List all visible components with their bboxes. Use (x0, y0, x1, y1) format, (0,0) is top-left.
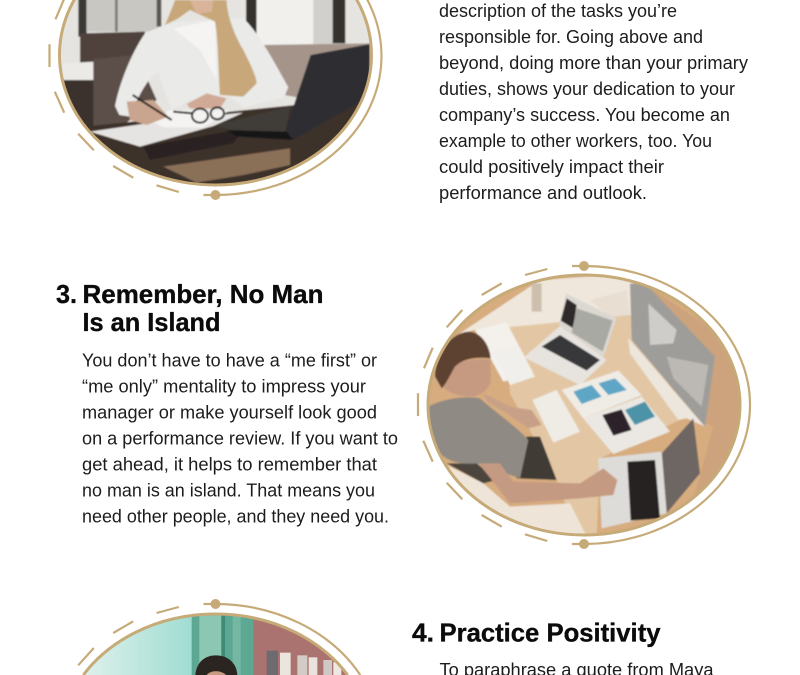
heading: tip 3: Remember, No Man (82, 279, 324, 309)
text block: tip 3 body: manager or make yourself look good (82, 402, 377, 422)
text block: tip 3 body: need other people, and they need you. (82, 506, 389, 526)
gold frame (428, 275, 740, 535)
long hair (165, 0, 257, 97)
text block: tip 3 body: no man is an island. That means you (82, 480, 375, 500)
floor lower left (443, 463, 587, 537)
gold frame (83, 614, 348, 675)
laptop on desk (524, 326, 607, 385)
right wall (654, 292, 738, 494)
text block: tip 2 body (439, 1, 748, 203)
photo: woman by teal curtains (73, 610, 357, 675)
arms (483, 393, 542, 428)
text block: tip 2 body: responsible for. Going above and (439, 27, 703, 47)
decorative ring: photo four (78, 599, 360, 675)
shirt (428, 397, 528, 478)
head (440, 359, 491, 397)
wall and floor (458, 276, 634, 335)
text block: tip 3 body: “me only” mentality to impress your (82, 376, 366, 396)
text block: tip 2 body: duties, shows your dedication to your (439, 79, 735, 99)
lower laptops (662, 418, 700, 513)
desk (507, 315, 687, 535)
text block: tip 2 body: beyond, doing more than your primary (439, 53, 748, 73)
photo: man at desk with laptops (423, 270, 747, 540)
heading: tip 3: Is an Island (82, 307, 220, 337)
monitor (628, 338, 705, 427)
decorative ring: photo one (50, 0, 382, 200)
trousers (517, 437, 557, 480)
gold frame (60, 0, 372, 185)
text block: tip 3 body: You don’t have to have a “me first” or (82, 350, 377, 370)
heading: tip 4: 4. (412, 618, 434, 648)
photo: woman writing at a laptop (57, 0, 377, 203)
shirt (115, 18, 288, 117)
text block: tip 2 body: company’s success. You become an (439, 105, 730, 125)
text block: tip 2 body: performance and outlook. (439, 183, 647, 203)
text block: tip 2 body: example to other workers, too. You (439, 131, 712, 151)
decorative ring: photo three (418, 261, 750, 549)
heading: tip 3: 3. (56, 279, 77, 309)
heading: tip 3 (56, 279, 324, 337)
text block: tip 2 body: description of the tasks you’re (439, 1, 677, 21)
text block: tip 3 body (82, 350, 398, 526)
text block: tip 2 body: could positively impact their (439, 157, 664, 177)
keyboard and book (532, 390, 580, 443)
text block: tip 3 body: on a performance review. If you want to (82, 428, 398, 448)
heading: tip 4: Practice Positivity (440, 618, 661, 648)
text block: tip 3 body: get ahead, it helps to remember that (82, 454, 377, 474)
